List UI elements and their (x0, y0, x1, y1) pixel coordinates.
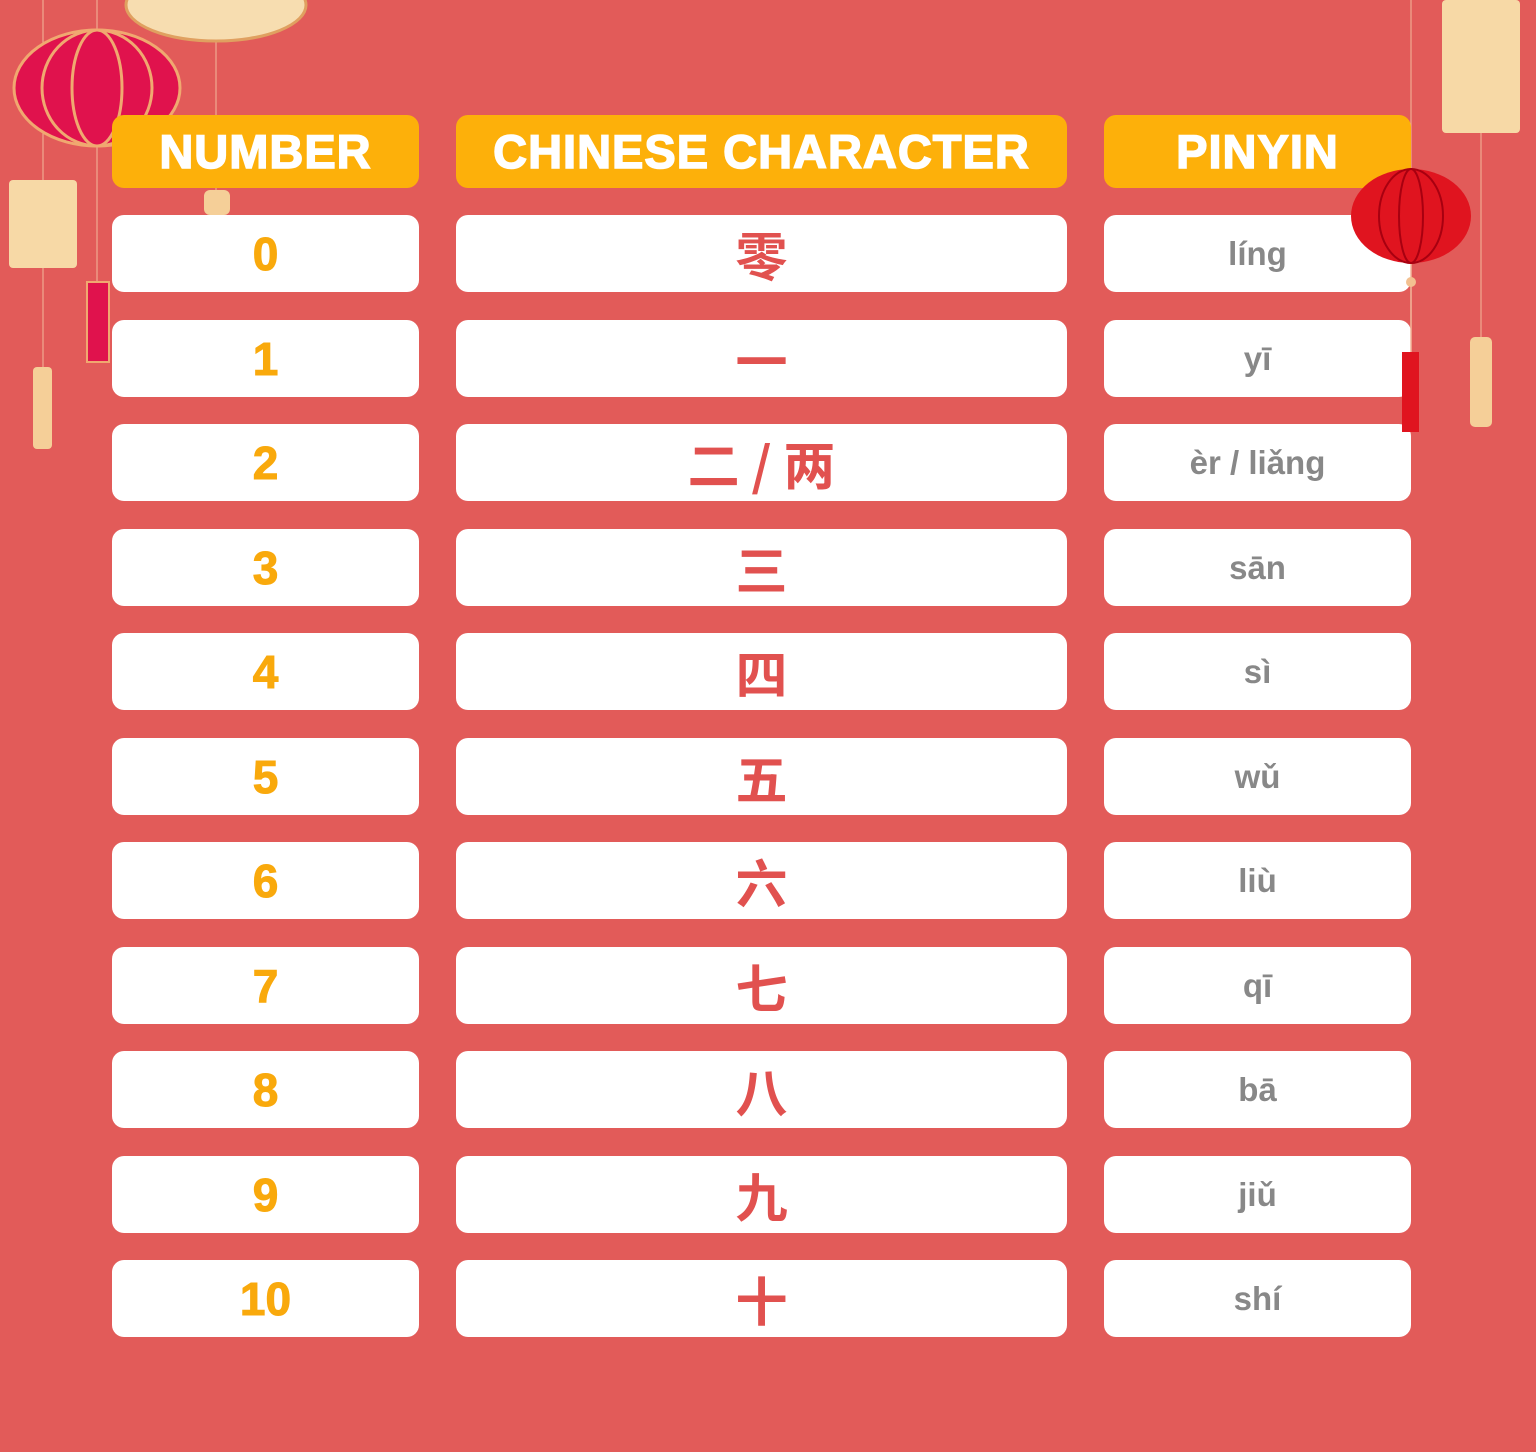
row 2: 2 (253, 436, 278, 488)
text: 一 (735, 321, 788, 396)
row 3 (112, 529, 419, 606)
row 0 (112, 215, 419, 292)
text: bā (1238, 1070, 1277, 1108)
text: líng (1228, 234, 1287, 272)
header: chinese character: CHINESE CHARACTER (493, 125, 1030, 178)
text: wǔ (1235, 758, 1280, 794)
row 7: 7 (253, 960, 278, 1012)
text: 十 (735, 1261, 788, 1336)
header: chinese character (456, 115, 1067, 188)
decorations: lanterns (9, 0, 1520, 449)
text: 四 (735, 634, 788, 709)
row 9 (112, 1156, 419, 1233)
header: pinyin (1104, 115, 1411, 188)
header: number: NUMBER (159, 125, 372, 178)
row 4 (112, 633, 419, 710)
row 8: 8 (253, 1064, 278, 1116)
text: 九 (735, 1157, 788, 1232)
row 6 (112, 842, 419, 919)
text: yī (1244, 340, 1271, 376)
row 1 (112, 320, 419, 397)
row 6: 6 (253, 854, 278, 906)
header: pinyin: PINYIN (1176, 125, 1339, 178)
row 7 (112, 947, 419, 1024)
header: number (112, 115, 419, 188)
text: jiǔ (1238, 1176, 1277, 1212)
text: 八 (735, 1052, 788, 1127)
row 10: 10 (240, 1272, 291, 1324)
text: 七 (735, 948, 788, 1023)
text: 五 (735, 739, 788, 814)
text: èr / liǎng (1190, 444, 1325, 480)
text: shí (1234, 1280, 1281, 1316)
row 4: 4 (253, 646, 278, 698)
text: 二 / 两 (688, 425, 835, 500)
text: 三 (735, 530, 788, 605)
row 5: 5 (253, 750, 278, 802)
text: 六 (735, 843, 788, 918)
text: sì (1244, 652, 1271, 690)
text: liù (1238, 862, 1277, 898)
row 1: 1 (253, 332, 278, 384)
text: qī (1243, 966, 1272, 1004)
row 9: 9 (253, 1168, 278, 1220)
text: sān (1229, 548, 1286, 586)
row 10 (112, 1260, 419, 1337)
row 3: 3 (253, 542, 278, 594)
row 5 (112, 738, 419, 815)
text: 零 (735, 216, 788, 291)
row 2 (112, 424, 419, 501)
row 0: 0 (253, 228, 278, 280)
decoration: red lantern over pinyin column (1351, 168, 1471, 432)
row 8 (112, 1051, 419, 1128)
